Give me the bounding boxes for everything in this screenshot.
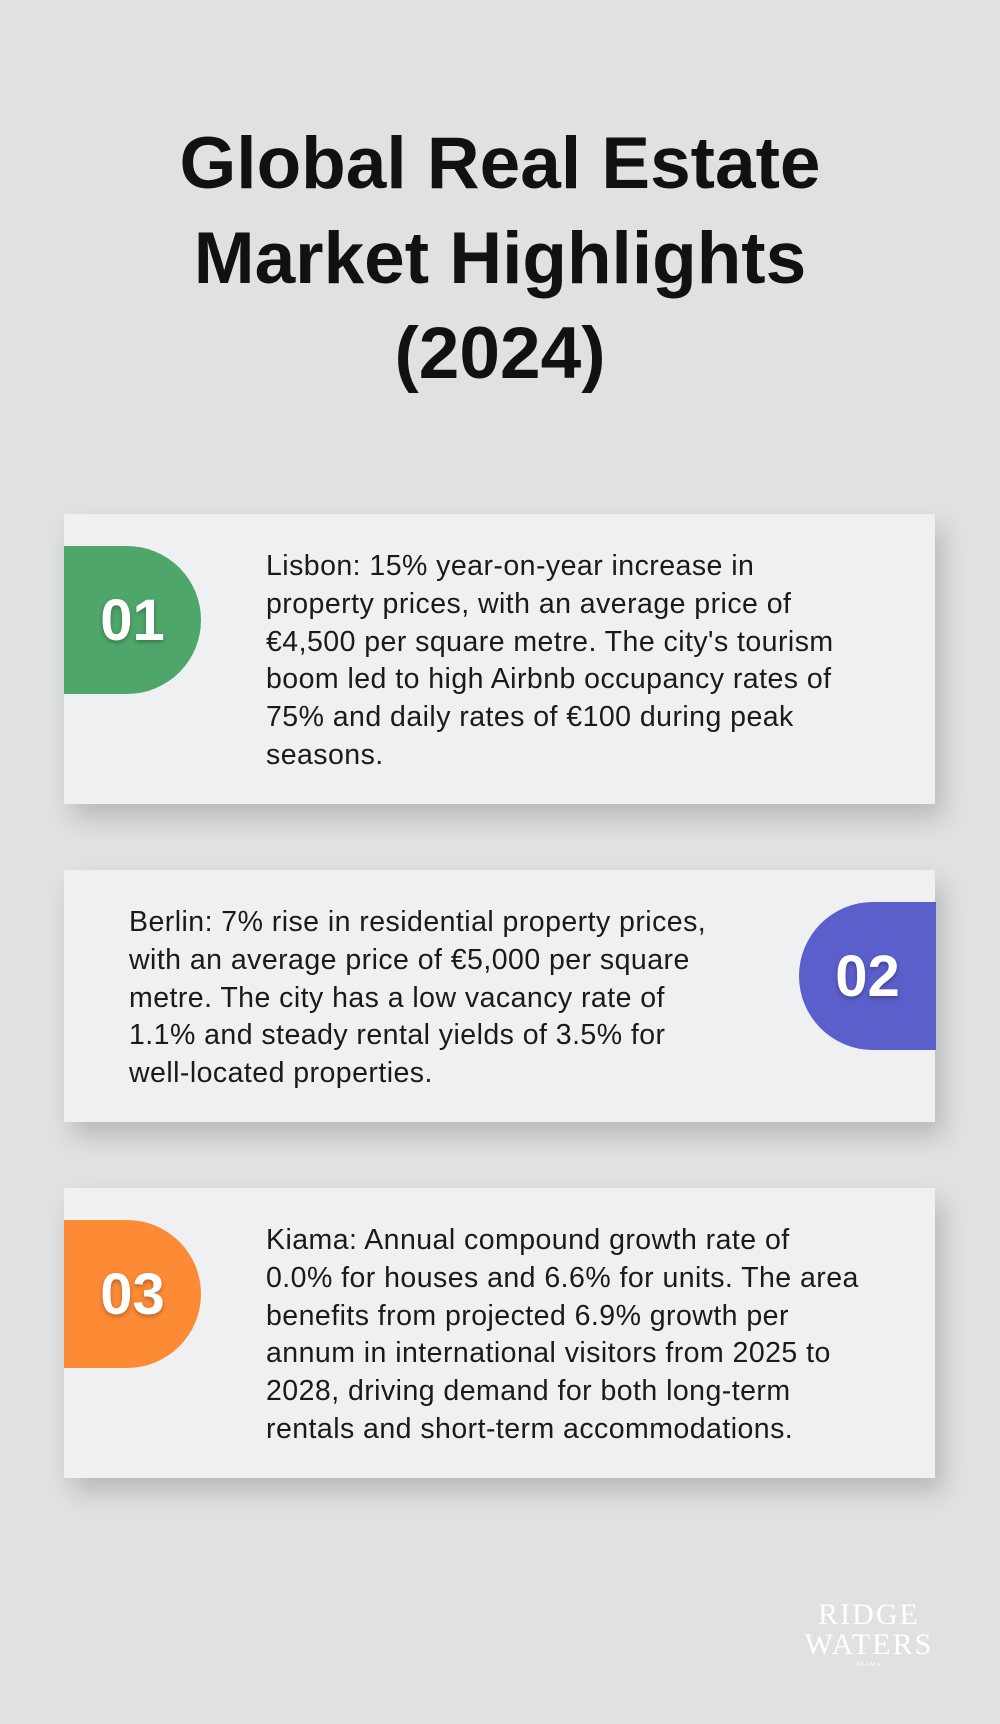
badge 02 xyxy=(799,902,936,1050)
logo: KIAMA xyxy=(856,1662,882,1668)
text: Berlin xyxy=(129,906,706,1089)
text: Kiama: Kiama: Annual compound growth rate of xyxy=(266,1224,790,1256)
text: Lisbon: boom led to high Airbnb occupancy rates of xyxy=(266,663,832,695)
title xyxy=(180,123,820,394)
panel: Lisbon xyxy=(64,514,935,804)
badge 03: 03 xyxy=(100,1262,165,1326)
text: Berlin: 1.1% and steady rental yields of 3.5% for xyxy=(129,1019,666,1051)
text: Kiama: rentals and short-term accommodations. xyxy=(266,1413,793,1445)
title: Market Highlights xyxy=(194,218,806,299)
text: Lisbon: seasons. xyxy=(266,739,384,771)
text: Berlin: metre. The city has a low vacancy rate of xyxy=(129,982,665,1014)
logo: RIDGE xyxy=(818,1598,920,1631)
title: Global Real Estate xyxy=(180,123,820,204)
panel: Berlin xyxy=(64,870,935,1122)
text: Lisbon: Lisbon: 15% year-on-year increase in xyxy=(266,550,754,582)
text: Kiama: benefits from projected 6.9% growth per xyxy=(266,1300,789,1332)
panel: Kiama xyxy=(64,1188,935,1478)
title: (2024) xyxy=(394,313,606,394)
badge 01 xyxy=(64,546,201,694)
text: Lisbon xyxy=(266,550,834,771)
badge 02: 02 xyxy=(835,944,900,1008)
badge 03 xyxy=(64,1220,201,1368)
text: Berlin: well-located properties. xyxy=(129,1057,433,1089)
text: Kiama: 2028, driving demand for both long-term xyxy=(266,1375,791,1407)
text: Lisbon: €4,500 per square metre. The city's tourism xyxy=(266,626,834,658)
text: Kiama: 0.0% for houses and 6.6% for units. The area xyxy=(266,1262,859,1294)
text: Berlin: Berlin: 7% rise in residential property prices, xyxy=(129,906,706,938)
text: Lisbon: property prices, with an average price of xyxy=(266,588,791,620)
text: Kiama xyxy=(266,1224,859,1445)
logo xyxy=(804,1598,933,1668)
text: Lisbon: 75% and daily rates of €100 during peak xyxy=(266,701,794,733)
badge 01: 01 xyxy=(100,588,165,652)
text: Berlin: with an average price of €5,000 per square xyxy=(129,944,690,976)
logo: WATERS xyxy=(805,1628,933,1661)
text: Kiama: annum in international visitors from 2025 to xyxy=(266,1337,831,1369)
